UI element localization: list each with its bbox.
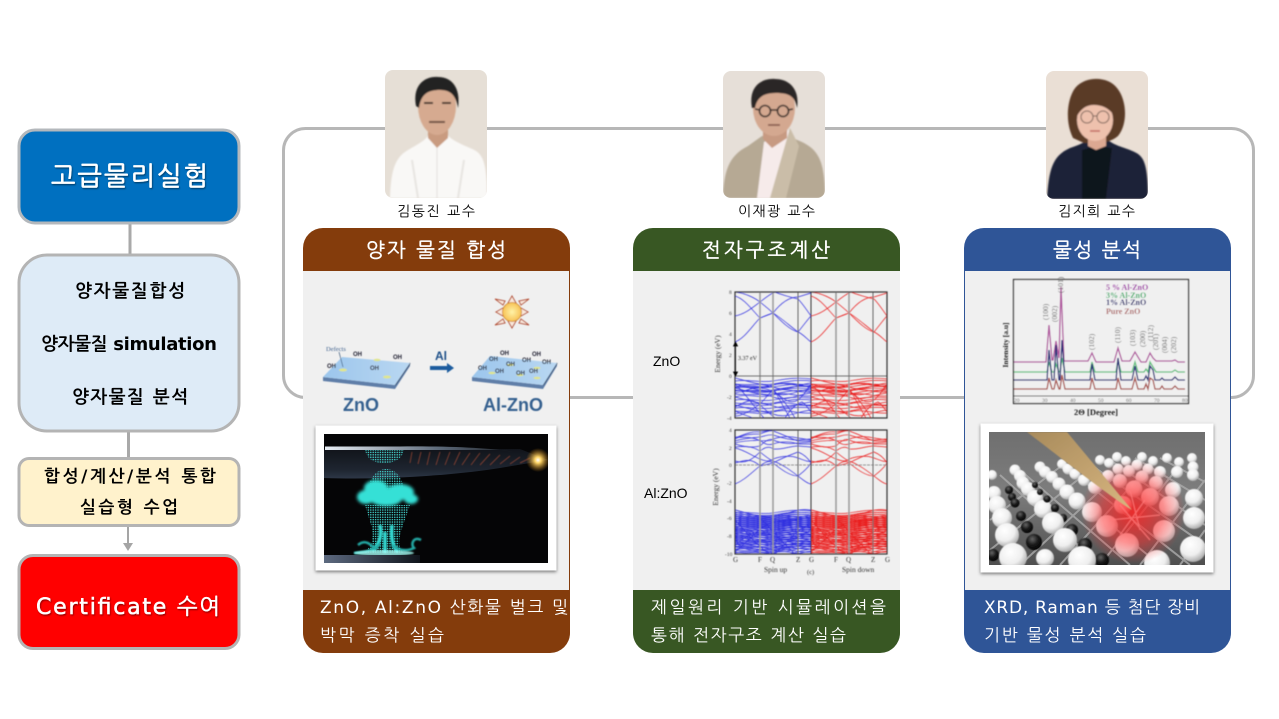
chart: XRD spectrum <box>1001 276 1188 417</box>
diagram: ZnO slab: Defects <box>326 346 346 353</box>
chart: XRD spectrum: Pure ZnO <box>1106 307 1140 316</box>
arrow: Al doping <box>430 349 454 373</box>
chart: XRD spectrum: (100) <box>1041 303 1050 320</box>
chart: XRD spectrum: 70 <box>1154 398 1160 404</box>
chart: XRD spectrum: Intensity [a.u] <box>1001 322 1010 368</box>
chart: XRD spectrum: 3% Al-ZnO <box>1106 291 1146 300</box>
panel footer: analysis: XRD, Raman 등 첨단 장비 <box>984 598 1200 618</box>
chart: XRD spectrum: (002) <box>1050 305 1059 322</box>
panel: electronic structure calculation <box>633 228 900 653</box>
certificate text: Certificate 수여 <box>36 595 220 620</box>
chart: Al:ZnO band structure: Q <box>846 556 851 564</box>
topic: analysis: 양자물질 분석 <box>72 387 188 408</box>
panel footer: synthesis <box>303 590 570 653</box>
chart: Al:ZnO band structure: -2 <box>727 481 732 487</box>
diagram: ZnO slab: OH <box>327 364 336 370</box>
chart: ZnO band structure <box>713 290 887 422</box>
chart: ZnO band structure: 2 <box>729 353 732 359</box>
diagram: Al-ZnO slab: OH <box>495 369 504 375</box>
panel: property analysis <box>964 228 1231 653</box>
panel heading: analysis: 물성 분석 <box>1053 238 1141 262</box>
panel heading: synthesis: 양자 물질 합성 <box>366 238 506 262</box>
box: class format <box>19 458 239 526</box>
chart: Al:ZnO band structure: G <box>809 556 814 564</box>
chart: ZnO band structure: Energy (eV) <box>713 335 722 373</box>
chart: Al:ZnO band structure: 2 <box>729 446 732 452</box>
topic: simulation: 양자물질 simulation <box>41 334 217 355</box>
chart: Al:ZnO band structure: 4 <box>729 428 732 434</box>
panel footer: calculation: 제일원리 기반 시뮬레이션을 <box>651 598 886 618</box>
diagram: Al-ZnO slab: OH <box>532 352 541 358</box>
chart: Al:ZnO band structure: 0 <box>729 463 732 469</box>
box: course topics <box>19 255 239 431</box>
chart: Al:ZnO band structure: G <box>733 556 738 564</box>
chart: Al:ZnO band structure: F <box>834 556 838 564</box>
name: Lee Jae-kwang: 이재광 교수 <box>738 204 815 220</box>
chart: Al:ZnO band structure: (c) <box>807 569 814 576</box>
diagram: ZnO slab <box>323 346 410 389</box>
chart: XRD spectrum: 60 <box>1126 398 1132 404</box>
panel: quantum material synthesis <box>303 228 570 653</box>
chart: XRD spectrum: (200) <box>1138 330 1147 347</box>
chart: Al:ZnO band structure: -8 <box>727 534 732 540</box>
label: ZnO: ZnO <box>343 395 379 415</box>
image: laser plume deposition <box>316 426 556 570</box>
chart: XRD spectrum: (103) <box>1128 329 1137 346</box>
chart: XRD spectrum: (110) <box>1113 327 1122 343</box>
chart: Al:ZnO band structure: -4 <box>727 499 732 505</box>
panel footer: analysis: 기반 물성 분석 실습 <box>984 626 1146 646</box>
chart: ZnO band structure: -4 <box>727 416 732 422</box>
chart: XRD spectrum: (202) <box>1169 336 1178 353</box>
chart: XRD spectrum: 30 <box>1042 398 1048 404</box>
diagram: ZnO slab: OH <box>353 352 362 358</box>
chart: Al:ZnO band structure: Spin up <box>764 565 787 574</box>
panel footer: synthesis: 박막 증착 실습 <box>320 626 444 646</box>
diagram: Al-ZnO slab: OH <box>529 369 538 375</box>
panel footer: analysis <box>964 590 1231 653</box>
chart: XRD spectrum: 2Θ [Degree] <box>1074 407 1118 417</box>
chart: ZnO band structure: 4 <box>729 332 732 338</box>
panel footer: synthesis: ZnO, Al:ZnO 산화물 벌크 및 <box>320 598 568 618</box>
chart: XRD spectrum: 50 <box>1098 398 1104 404</box>
connector: title to topics <box>128 224 132 255</box>
box: course title <box>19 130 239 223</box>
panel footer: calculation <box>633 590 900 653</box>
chart: Al:ZnO band structure: F <box>758 556 762 564</box>
chart: XRD spectrum: (101) <box>1056 276 1065 293</box>
chart: ZnO band structure: 8 <box>729 290 732 296</box>
diagram: ZnO slab: OH <box>393 355 402 361</box>
topic: synthesis: 양자물질합성 <box>75 281 185 302</box>
arrow: Al doping: Al <box>435 349 447 363</box>
label: Al:ZnO: Al:ZnO <box>644 485 688 501</box>
diagram: Al-ZnO slab: OH <box>542 360 551 366</box>
panel heading: calculation: 전자구조계산 <box>702 238 830 262</box>
panel footer: calculation: 통해 전자구조 계산 실습 <box>651 626 846 646</box>
name: Kim Dong-jin: 김동진 교수 <box>397 204 475 220</box>
box: certificate <box>19 556 239 648</box>
chart: XRD spectrum: 5 % Al-ZnO <box>1106 283 1148 292</box>
chart: Al:ZnO band structure: Z <box>871 556 875 564</box>
diagram: Al-ZnO slab: OH <box>489 357 498 363</box>
chart: Al:ZnO band structure: -6 <box>727 516 732 522</box>
photo: Kim Dong-jin <box>385 70 487 198</box>
chart: Al:ZnO band structure: Z <box>796 556 800 564</box>
class format line 2: 실습형 수업 <box>80 498 178 518</box>
chart: ZnO band structure: -2 <box>727 395 732 401</box>
photo: Lee Jae-kwang <box>723 71 825 198</box>
chart: XRD spectrum: (004) <box>1160 336 1169 353</box>
chart: ZnO band structure: 0 <box>729 374 732 380</box>
chart: Al:ZnO band structure: Energy (eV) <box>711 468 720 506</box>
chart: ZnO band structure: 6 <box>729 311 732 317</box>
diagram: Al-ZnO slab: OH <box>516 371 525 377</box>
course title text: 고급물리실험 <box>51 162 208 192</box>
icon: sun <box>495 296 529 328</box>
chart: XRD spectrum: 80 <box>1182 398 1188 404</box>
image: Raman probe on lattice <box>980 424 1214 576</box>
chart: Al:ZnO band structure <box>711 428 890 576</box>
chart: ZnO band structure: 3.37 eV <box>738 356 758 362</box>
arrow: class format to certificate <box>123 526 133 551</box>
chart: XRD spectrum: (201) <box>1151 333 1160 350</box>
panel heading: calculation <box>633 228 900 271</box>
class format line 1: 합성/계산/분석 통합 <box>44 467 216 487</box>
diagram: Al-ZnO slab: OH <box>500 351 509 357</box>
chart: XRD spectrum: (112) <box>1146 325 1155 341</box>
panel heading: synthesis <box>303 228 570 271</box>
diagram: Al-ZnO slab: OH <box>478 366 487 372</box>
chart: Al:ZnO band structure: G <box>885 556 890 564</box>
label: ZnO: ZnO <box>653 353 680 369</box>
chart: Al:ZnO band structure: Q <box>770 556 775 564</box>
photo: Kim Ji-hee <box>1046 71 1148 199</box>
connector frame line <box>284 128 1254 398</box>
chart: XRD spectrum: 40 <box>1070 398 1076 404</box>
diagram: Al-ZnO slab: OH <box>506 362 515 368</box>
diagram: ZnO slab: OH <box>370 366 379 372</box>
name: Kim Ji-hee: 김지희 교수 <box>1058 204 1135 220</box>
chart: XRD spectrum: 20 <box>1014 398 1020 404</box>
panel heading: analysis <box>964 228 1231 271</box>
chart: XRD spectrum: 1% Al-ZnO <box>1106 298 1146 307</box>
diagram: Al-ZnO slab: OH <box>522 358 531 364</box>
diagram: Al-ZnO slab <box>472 351 557 389</box>
chart: XRD spectrum: (102) <box>1087 333 1096 350</box>
label: Al-ZnO: Al-ZnO <box>483 395 543 415</box>
chart: Al:ZnO band structure: -10 <box>725 552 733 558</box>
connector: topics to class format <box>127 432 130 459</box>
chart: Al:ZnO band structure: Spin down <box>842 565 875 574</box>
